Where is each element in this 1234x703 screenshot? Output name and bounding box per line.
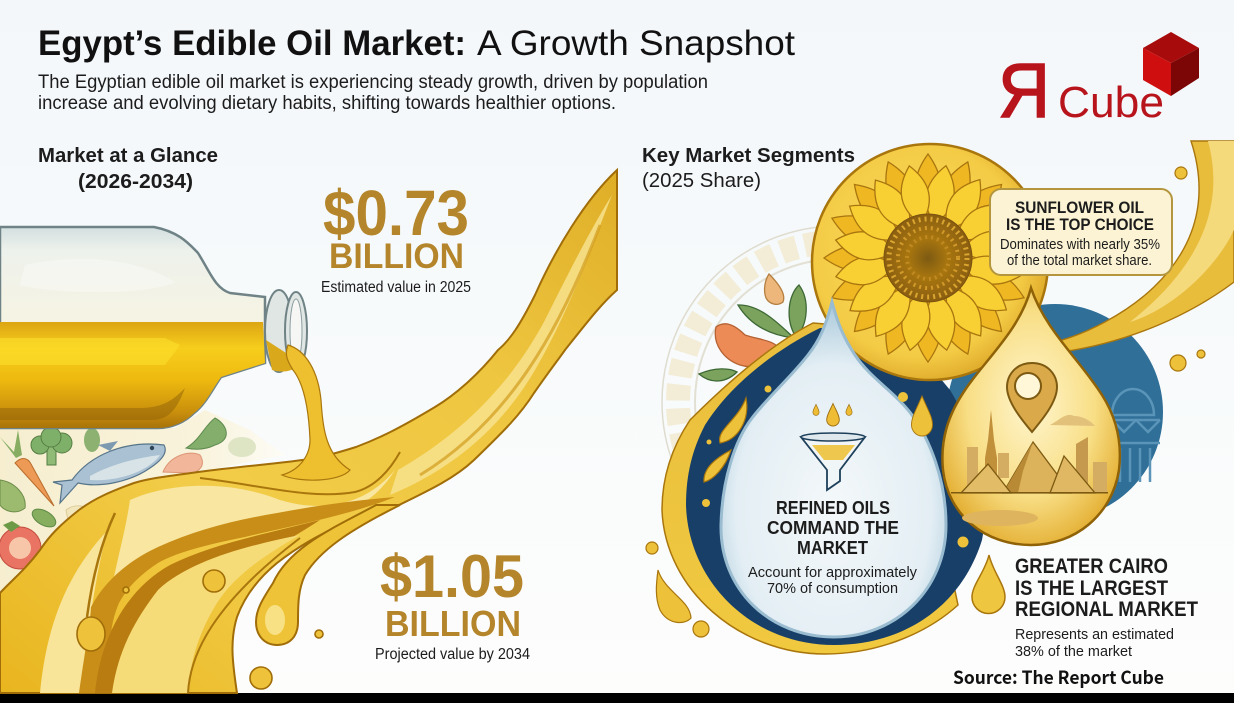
icon: cairo skyline (951, 410, 1108, 526)
title: A Growth Snapshot (477, 24, 795, 63)
pale centre band (112, 535, 300, 693)
logo word: Cube (1058, 78, 1164, 127)
label: greater cairo (1015, 555, 1198, 660)
heading: key market segments: (2025 Share) (642, 170, 761, 192)
source note: Source: The Report Cube (953, 664, 1164, 690)
title (38, 24, 795, 63)
heading: market at a glance: Market at a Glance (38, 145, 218, 167)
fish (53, 441, 165, 503)
blue circle with architecture (947, 304, 1163, 520)
water drop: refined oils (721, 302, 946, 637)
bottle neck rings (265, 290, 307, 372)
heading: key market segments: Key Market Segments (642, 145, 855, 167)
callout: sunflower oil: IS THE TOP CHOICE (1006, 215, 1154, 234)
icon: location pin (1007, 363, 1057, 432)
stat: 0.73 billion: $0.73 (323, 177, 469, 249)
heading: market at a glance: (2026-2034) (78, 171, 193, 193)
gold droplets around the ring (646, 167, 1205, 637)
decorative mandala (662, 226, 1014, 578)
intro text: increase and evolving dietary habits, shifting towards healthier options. (38, 93, 616, 114)
label: refined oils: MARKET (797, 538, 868, 558)
label: refined oils: Account for approximately (748, 564, 917, 581)
pale left sheet (40, 530, 108, 693)
stat: 0.73 billion (321, 177, 471, 296)
stat: 0.73 billion: BILLION (329, 237, 464, 276)
callout: sunflower oil: of the total market share. (1007, 253, 1152, 269)
bottle shine (0, 338, 180, 365)
heading: key market segments (642, 145, 855, 192)
callout: sunflower oil (990, 189, 1172, 275)
hanging oil strand and drop (256, 505, 400, 645)
food illustration (0, 410, 285, 593)
callout: sunflower oil: SUNFLOWER OIL (1015, 198, 1144, 217)
panel: market at a glance (0, 145, 617, 693)
icon: funnel (801, 404, 865, 490)
navy circle (686, 328, 984, 645)
label: greater cairo: Represents an estimated (1015, 626, 1174, 643)
stat: 1.05 billion: $1.05 (380, 543, 524, 610)
label: greater cairo: REGIONAL MARKET (1015, 598, 1198, 621)
carrot (15, 459, 54, 506)
upper highlight (110, 470, 395, 600)
sunflower badge (812, 144, 1048, 380)
tomato (0, 521, 41, 569)
label: refined oils: COMMAND THE (767, 518, 899, 538)
oil droplets (77, 570, 323, 689)
label: refined oils: 70% of consumption (767, 580, 898, 597)
bottle (0, 227, 307, 428)
stat: 1.05 billion: Projected value by 2034 (375, 646, 530, 663)
icon: almond (765, 274, 784, 304)
right oil swoosh (1020, 141, 1234, 360)
title: Egypt’s Edible Oil Market: (38, 24, 466, 63)
icon: red cube (1143, 32, 1199, 96)
leafy vegetable (0, 430, 22, 458)
label: greater cairo: GREATER CAIRO (1015, 555, 1168, 578)
stat: 0.73 billion: Estimated value in 2025 (321, 279, 471, 296)
stat: 1.05 billion (375, 543, 530, 663)
icon: leaf (699, 369, 737, 381)
logo letter: Я (998, 48, 1050, 134)
label: refined oils (748, 498, 917, 597)
gold ring swoosh (662, 323, 958, 654)
bottle glass (0, 227, 265, 428)
poured stream and pool (282, 345, 350, 480)
oil flow (0, 170, 617, 693)
heading: market at a glance (38, 145, 218, 193)
gold drop: greater cairo (942, 288, 1120, 545)
stat: 1.05 billion: BILLION (385, 603, 521, 644)
amber band (79, 497, 395, 693)
intro text: The Egyptian edible oil market is experiencing steady growth, driven by population (38, 72, 708, 93)
panel: key market segments (642, 141, 1234, 660)
icon: oil drop (972, 555, 1005, 614)
sunflower petals (824, 154, 1032, 362)
label: refined oils: REFINED OILS (776, 498, 890, 518)
logo: RCube (998, 32, 1199, 134)
bottom black band (0, 693, 1234, 703)
label: greater cairo: IS THE LARGEST (1015, 577, 1168, 600)
label: greater cairo: 38% of the market (1015, 643, 1133, 660)
icon: leaf (789, 285, 806, 337)
intro text (38, 72, 708, 114)
greens and pink food (163, 453, 202, 473)
callout: sunflower oil: Dominates with nearly 35% (1000, 237, 1160, 253)
icon: peach slice (715, 324, 780, 367)
icon: leaf (738, 305, 794, 338)
bottle oil (0, 322, 265, 428)
broccoli (31, 427, 72, 465)
food icons (699, 274, 806, 381)
